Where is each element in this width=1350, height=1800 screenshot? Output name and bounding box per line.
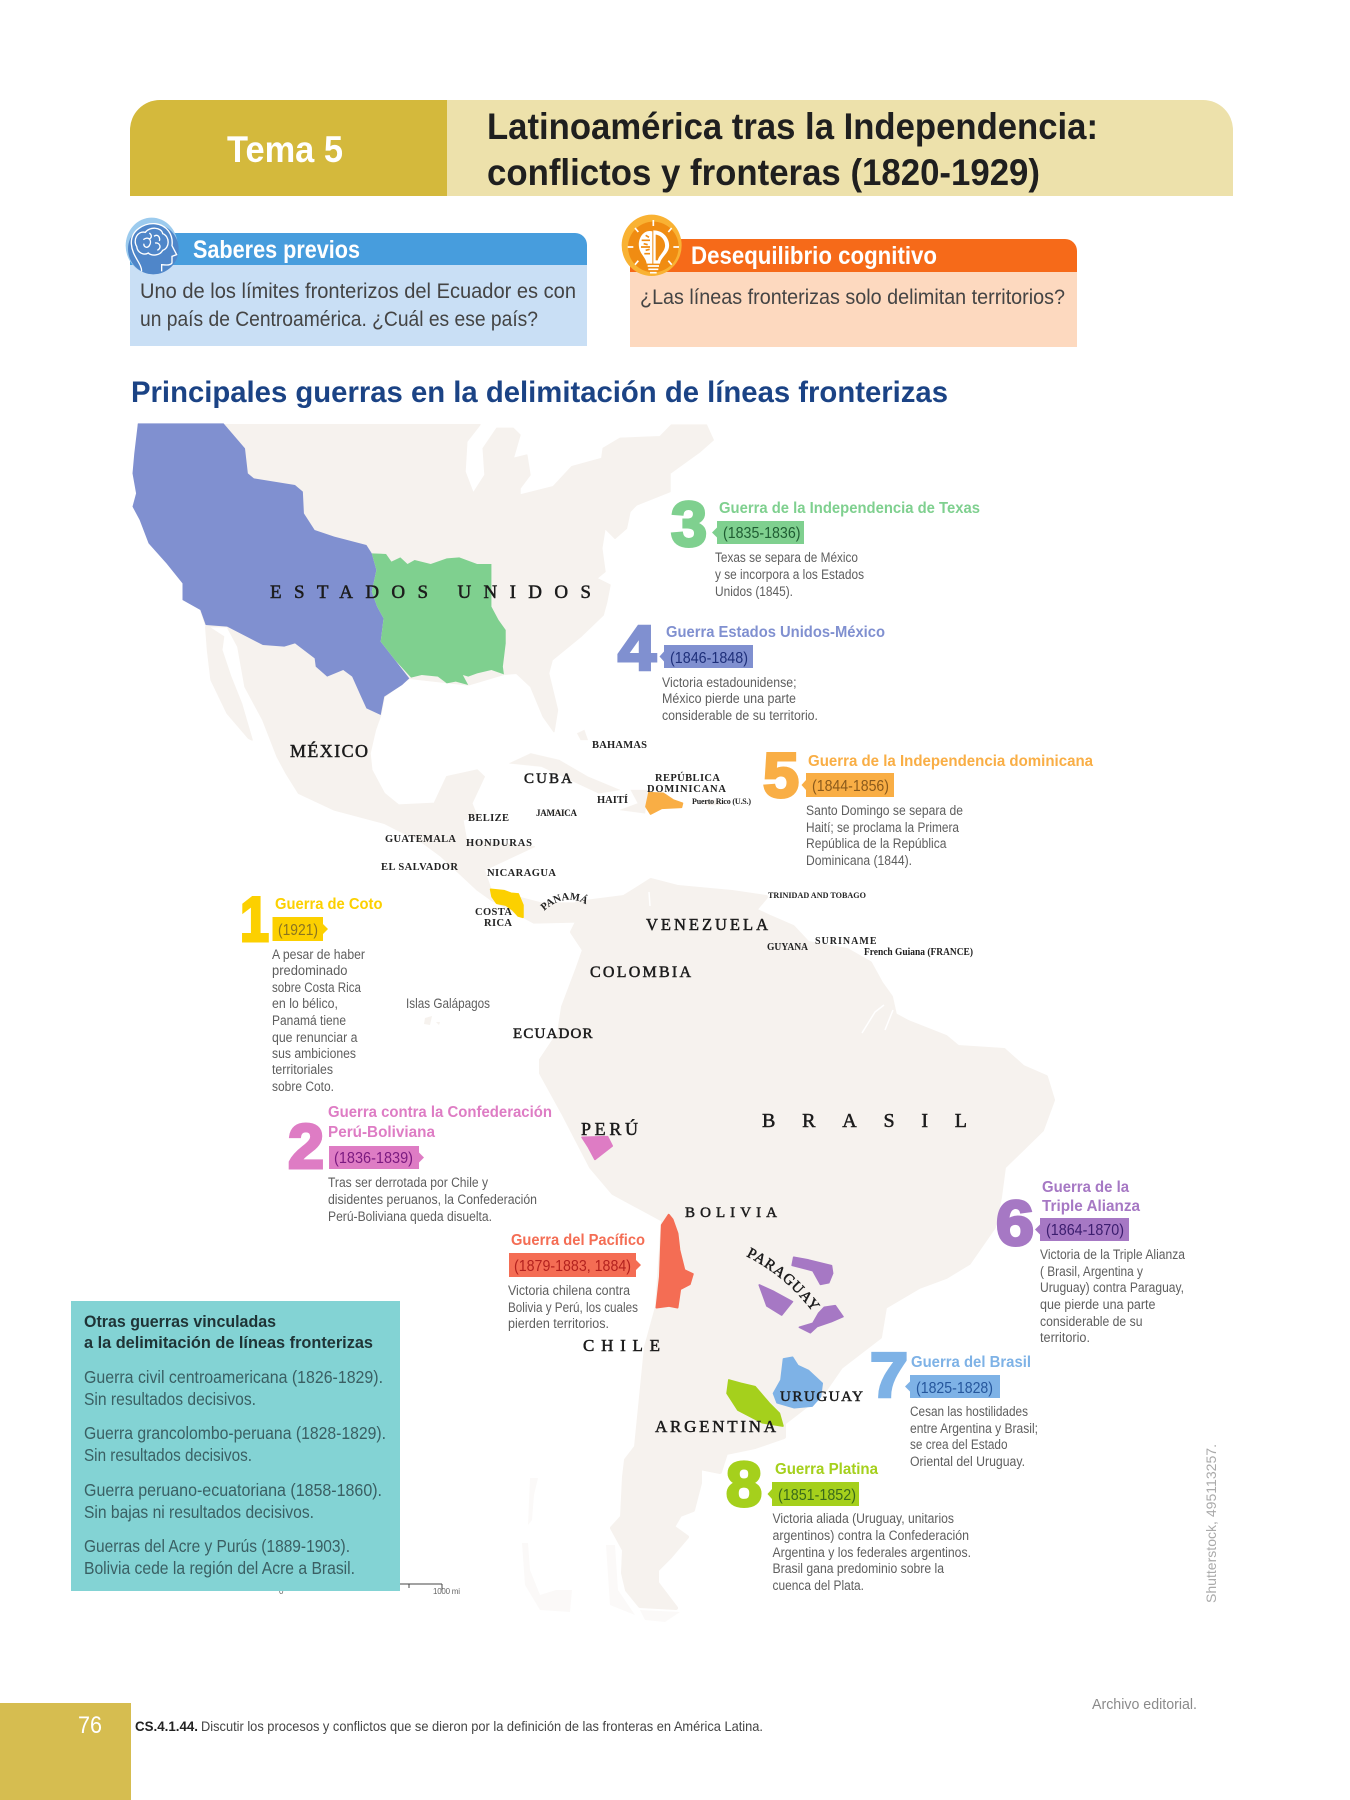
number 5: 5 <box>763 741 799 811</box>
description <box>910 1404 1038 1469</box>
scale bar: 1000 mi <box>433 1587 460 1596</box>
territory: Texas <box>372 553 506 685</box>
number 2: 2 <box>288 1112 324 1182</box>
title: Guerra de Coto <box>275 896 383 913</box>
description: México pierde una parte <box>662 691 796 706</box>
date tag <box>1035 1218 1129 1241</box>
date tag: (1825-1828) <box>916 1380 993 1397</box>
country labels: SURINAME <box>815 936 877 947</box>
description: Bolivia y Perú, los cuales <box>508 1300 638 1315</box>
country labels: MÉXICO <box>290 740 368 761</box>
footer page number band <box>0 1703 131 1800</box>
title banner: Latinoamérica tras la Independencia: <box>487 106 1098 147</box>
country labels: BELIZE <box>468 813 509 824</box>
country labels: RICA <box>484 918 512 929</box>
description: A pesar de haber <box>272 947 365 962</box>
callout 3: Independencia de Texas <box>671 490 980 599</box>
country labels: ARGENTINA <box>655 1417 777 1436</box>
panel heading: Otras guerras vinculadas <box>84 1312 276 1331</box>
description: Victoria chilena contra <box>508 1283 630 1298</box>
date tag <box>905 1375 1000 1398</box>
panel: saberes previos <box>130 233 587 346</box>
description: argentinos) contra la Confederación <box>772 1528 969 1543</box>
map of the Americas <box>132 423 1055 1610</box>
footer skill text: Discutir los procesos y conflictos que se dieron por la definición de las fronteras en América Latina. <box>201 1718 763 1734</box>
title <box>328 1104 552 1141</box>
footer skill text: CS.4.1.44. <box>135 1718 198 1734</box>
description: territoriales <box>272 1062 333 1077</box>
land: faint southern fragments <box>522 1478 680 1622</box>
title: Guerra de la Independencia de Texas <box>719 500 980 517</box>
description: Dominicana (1844). <box>806 853 912 868</box>
country labels: BAHAMAS <box>592 740 647 751</box>
source credit: Archivo editorial. <box>1092 1696 1197 1713</box>
description: ( Brasil, Argentina y <box>1040 1264 1143 1279</box>
description: sobre Coto. <box>272 1079 334 1094</box>
country labels: VENEZUELA <box>646 915 768 934</box>
number 4: 4 <box>618 614 656 684</box>
territory: Entre Ríos <box>727 1380 783 1426</box>
title: Triple Alianza <box>1042 1198 1140 1215</box>
country labels: JAMAICA <box>536 808 578 818</box>
country labels: URUGUAY <box>780 1389 863 1405</box>
description: Panamá tiene <box>272 1013 346 1028</box>
title: Guerra contra la Confederación <box>328 1104 552 1121</box>
lakes and details <box>649 892 893 1033</box>
description: cuenca del Plata. <box>772 1578 864 1593</box>
description: República de la República <box>806 836 947 851</box>
icon: lightbulb with brain <box>622 215 682 276</box>
title: Guerra de la Independencia dominicana <box>808 753 1093 770</box>
country labels: PERÚ <box>581 1118 638 1139</box>
description: y se incorpora a los Estados <box>715 567 864 582</box>
callout 2: Confederación Perú-Boliviana <box>288 1104 552 1224</box>
description: Oriental del Uruguay. <box>910 1454 1025 1469</box>
icon: head with brain <box>126 218 179 274</box>
title banner: Tema 5 <box>227 129 343 170</box>
country labels: HONDURAS <box>466 838 532 849</box>
description: Santo Domingo se separa de <box>806 803 963 818</box>
territory: Chile Pacific <box>656 1215 693 1308</box>
callout 7: Guerra del Brasil <box>870 1341 1038 1469</box>
description: Brasil gana predominio sobre la <box>772 1561 944 1576</box>
description: que renunciar a <box>272 1030 358 1045</box>
war list: Guerra grancolombo-peruana (1828-1829). <box>84 1423 386 1443</box>
description <box>806 803 963 868</box>
country labels: CHILE <box>583 1336 660 1355</box>
country labels: ECUADOR <box>513 1026 592 1042</box>
callout 1: Guerra de Coto <box>240 885 383 1094</box>
country labels: DOMINICANA <box>647 784 726 795</box>
date tag: (1851-1852) <box>778 1487 856 1504</box>
panel: saberes previos: Saberes previos <box>193 236 360 264</box>
country labels: Islas Galápagos <box>406 995 490 1011</box>
title: Perú-Boliviana <box>328 1124 435 1141</box>
panel: saberes previos: un país de Centroamérica. ¿Cuál es ese país? <box>140 308 538 331</box>
war list: Bolivia cede la región del Acre a Brasil. <box>84 1558 355 1578</box>
territory: Coto / Costa Rica <box>491 889 523 917</box>
war list: Sin resultados decisivos. <box>84 1445 252 1465</box>
callout 5: Independencia dominicana <box>763 741 1093 868</box>
date tag: (1836-1839) <box>334 1150 413 1167</box>
heading: map section: Principales guerras en la delimitación de líneas fronterizas <box>131 376 948 409</box>
panel heading: a la delimitación de líneas fronterizas <box>84 1333 373 1352</box>
description: Victoria aliada (Uruguay, unitarios <box>772 1511 954 1526</box>
country labels: REPÚBLICA <box>655 772 720 784</box>
description: sobre Costa Rica <box>272 980 361 995</box>
country labels: COLOMBIA <box>590 964 691 981</box>
territory: Paraguay losses <box>759 1257 843 1333</box>
description: territorio. <box>1040 1330 1090 1345</box>
panel: desequilibrio cognitivo: Desequilibrio cognitivo <box>691 242 937 270</box>
country labels: PARAGUAY <box>746 1247 820 1310</box>
description: Tras ser derrotada por Chile y <box>328 1175 488 1190</box>
war list: Sin bajas ni resultados decisivos. <box>84 1502 314 1522</box>
country labels: GUATEMALA <box>385 834 456 845</box>
description <box>272 947 365 1094</box>
number 7: 7 <box>870 1341 908 1411</box>
panel: desequilibrio cognitivo: ¿Las líneas fronterizas solo delimitan territorios? <box>640 286 1065 309</box>
territory: Mexican Cession <box>132 423 409 715</box>
territory: Uruguay <box>774 1357 822 1408</box>
description <box>328 1175 537 1224</box>
country labels: ESTADOS UNIDOS <box>270 582 591 603</box>
country labels: CUBA <box>524 771 572 787</box>
date tag: (1864-1870) <box>1046 1222 1124 1239</box>
date tag: (1835-1836) <box>723 525 800 542</box>
title <box>1042 1179 1140 1215</box>
war list <box>84 1367 386 1578</box>
title: Guerra Estados Unidos-México <box>666 624 885 641</box>
description: entre Argentina y Brasil; <box>910 1421 1038 1436</box>
date tag <box>272 917 328 941</box>
land: North and Central America <box>138 425 713 923</box>
land: South America <box>541 880 1053 1608</box>
callout 4: Estados Unidos-México <box>618 614 885 723</box>
war list: Sin resultados decisivos. <box>84 1389 256 1409</box>
country labels: EL SALVADOR <box>381 862 458 873</box>
date tag: (1879-1883, 1884) <box>514 1258 631 1275</box>
description: se crea del Estado <box>910 1437 1008 1452</box>
description <box>772 1511 971 1593</box>
description: pierden territorios. <box>508 1316 609 1331</box>
number 8: 8 <box>726 1450 762 1520</box>
title banner <box>130 100 1233 196</box>
scale bar <box>279 1584 460 1596</box>
country labels <box>270 582 973 1436</box>
description: disidentes peruanos, la Confederación <box>328 1192 537 1207</box>
panel heading <box>84 1312 373 1352</box>
description: Haití; se proclama la Primera <box>806 820 959 835</box>
description <box>662 675 818 723</box>
image credit: Shutterstock: Shutterstock, 495113257. <box>1203 1444 1219 1603</box>
country labels: COSTA <box>475 907 512 918</box>
description: que pierde una parte <box>1040 1297 1156 1312</box>
panel: desequilibrio cognitivo <box>630 239 1077 347</box>
country labels: GUYANA <box>767 942 809 953</box>
description: Texas se separa de México <box>715 550 858 565</box>
description: Victoria de la Triple Alianza <box>1040 1247 1185 1262</box>
land: Cuba and islands <box>509 730 720 815</box>
war list: Guerra peruano-ecuatoriana (1858-1860). <box>84 1480 382 1500</box>
country labels: HAITÍ <box>597 794 628 806</box>
callout 8: Guerra Platina <box>726 1450 971 1593</box>
title: Guerra Platina <box>775 1461 878 1478</box>
title: Guerra del Pacífico <box>511 1232 645 1249</box>
callout 6: Triple Alianza <box>996 1179 1185 1345</box>
country labels: BRASIL <box>762 1110 967 1132</box>
title banner: conflictos y fronteras (1820-1929) <box>487 152 1040 193</box>
description: Uruguay) contra Paraguay, <box>1040 1280 1184 1295</box>
footer page number band: 76 <box>78 1712 102 1739</box>
description: en lo bélico, <box>272 996 338 1011</box>
description: sus ambiciones <box>272 1046 356 1061</box>
date tag <box>329 1146 424 1169</box>
date tag: (1846-1848) <box>670 650 748 667</box>
country labels: French Guiana (FRANCE) <box>864 947 973 958</box>
number 6: 6 <box>996 1189 1034 1259</box>
country labels: BOLIVIA <box>685 1205 777 1221</box>
description: Argentina y los federales argentinos. <box>772 1545 971 1560</box>
date tag <box>712 521 804 544</box>
description: Victoria estadounidense; <box>662 675 796 690</box>
territory: Peru-Bolivia <box>582 1137 612 1159</box>
description: considerable de su <box>1040 1314 1142 1329</box>
country labels: PANAMÁ <box>540 892 588 911</box>
description: Cesan las hostilidades <box>910 1404 1028 1419</box>
scale bar: 0 <box>279 1587 284 1596</box>
panel: otras guerras <box>71 1301 400 1591</box>
date tag <box>768 1482 859 1506</box>
callout: Guerra del Pacífico <box>508 1232 645 1331</box>
description: Perú-Boliviana queda disuelta. <box>328 1209 492 1224</box>
war list: Guerra civil centroamericana (1826-1829). <box>84 1367 383 1387</box>
country labels: NICARAGUA <box>487 868 556 879</box>
date tag <box>802 773 894 797</box>
war list: Guerras del Acre y Purús (1889-1903). <box>84 1536 350 1556</box>
date tag <box>660 645 753 668</box>
country labels: TRINIDAD AND TOBAGO <box>768 890 866 900</box>
description: Unidos (1845). <box>715 584 793 599</box>
date tag: (1844-1856) <box>812 778 889 795</box>
description <box>715 550 864 599</box>
date tag: (1921) <box>278 922 318 939</box>
description <box>508 1283 638 1331</box>
panel: saberes previos: Uno de los límites fronterizos del Ecuador es con <box>140 280 576 303</box>
number 1: 1 <box>240 885 269 955</box>
title: Guerra del Brasil <box>911 1354 1031 1371</box>
title: Guerra de la <box>1042 1179 1129 1196</box>
faded Galápagos <box>424 1016 440 1025</box>
description <box>1040 1247 1185 1345</box>
number 3: 3 <box>671 490 707 560</box>
description: predominado <box>272 963 348 978</box>
territory: Dominican Republic <box>646 793 682 814</box>
description: considerable de su territorio. <box>662 708 818 723</box>
country labels: Puerto Rico (U.S.) <box>692 797 751 806</box>
